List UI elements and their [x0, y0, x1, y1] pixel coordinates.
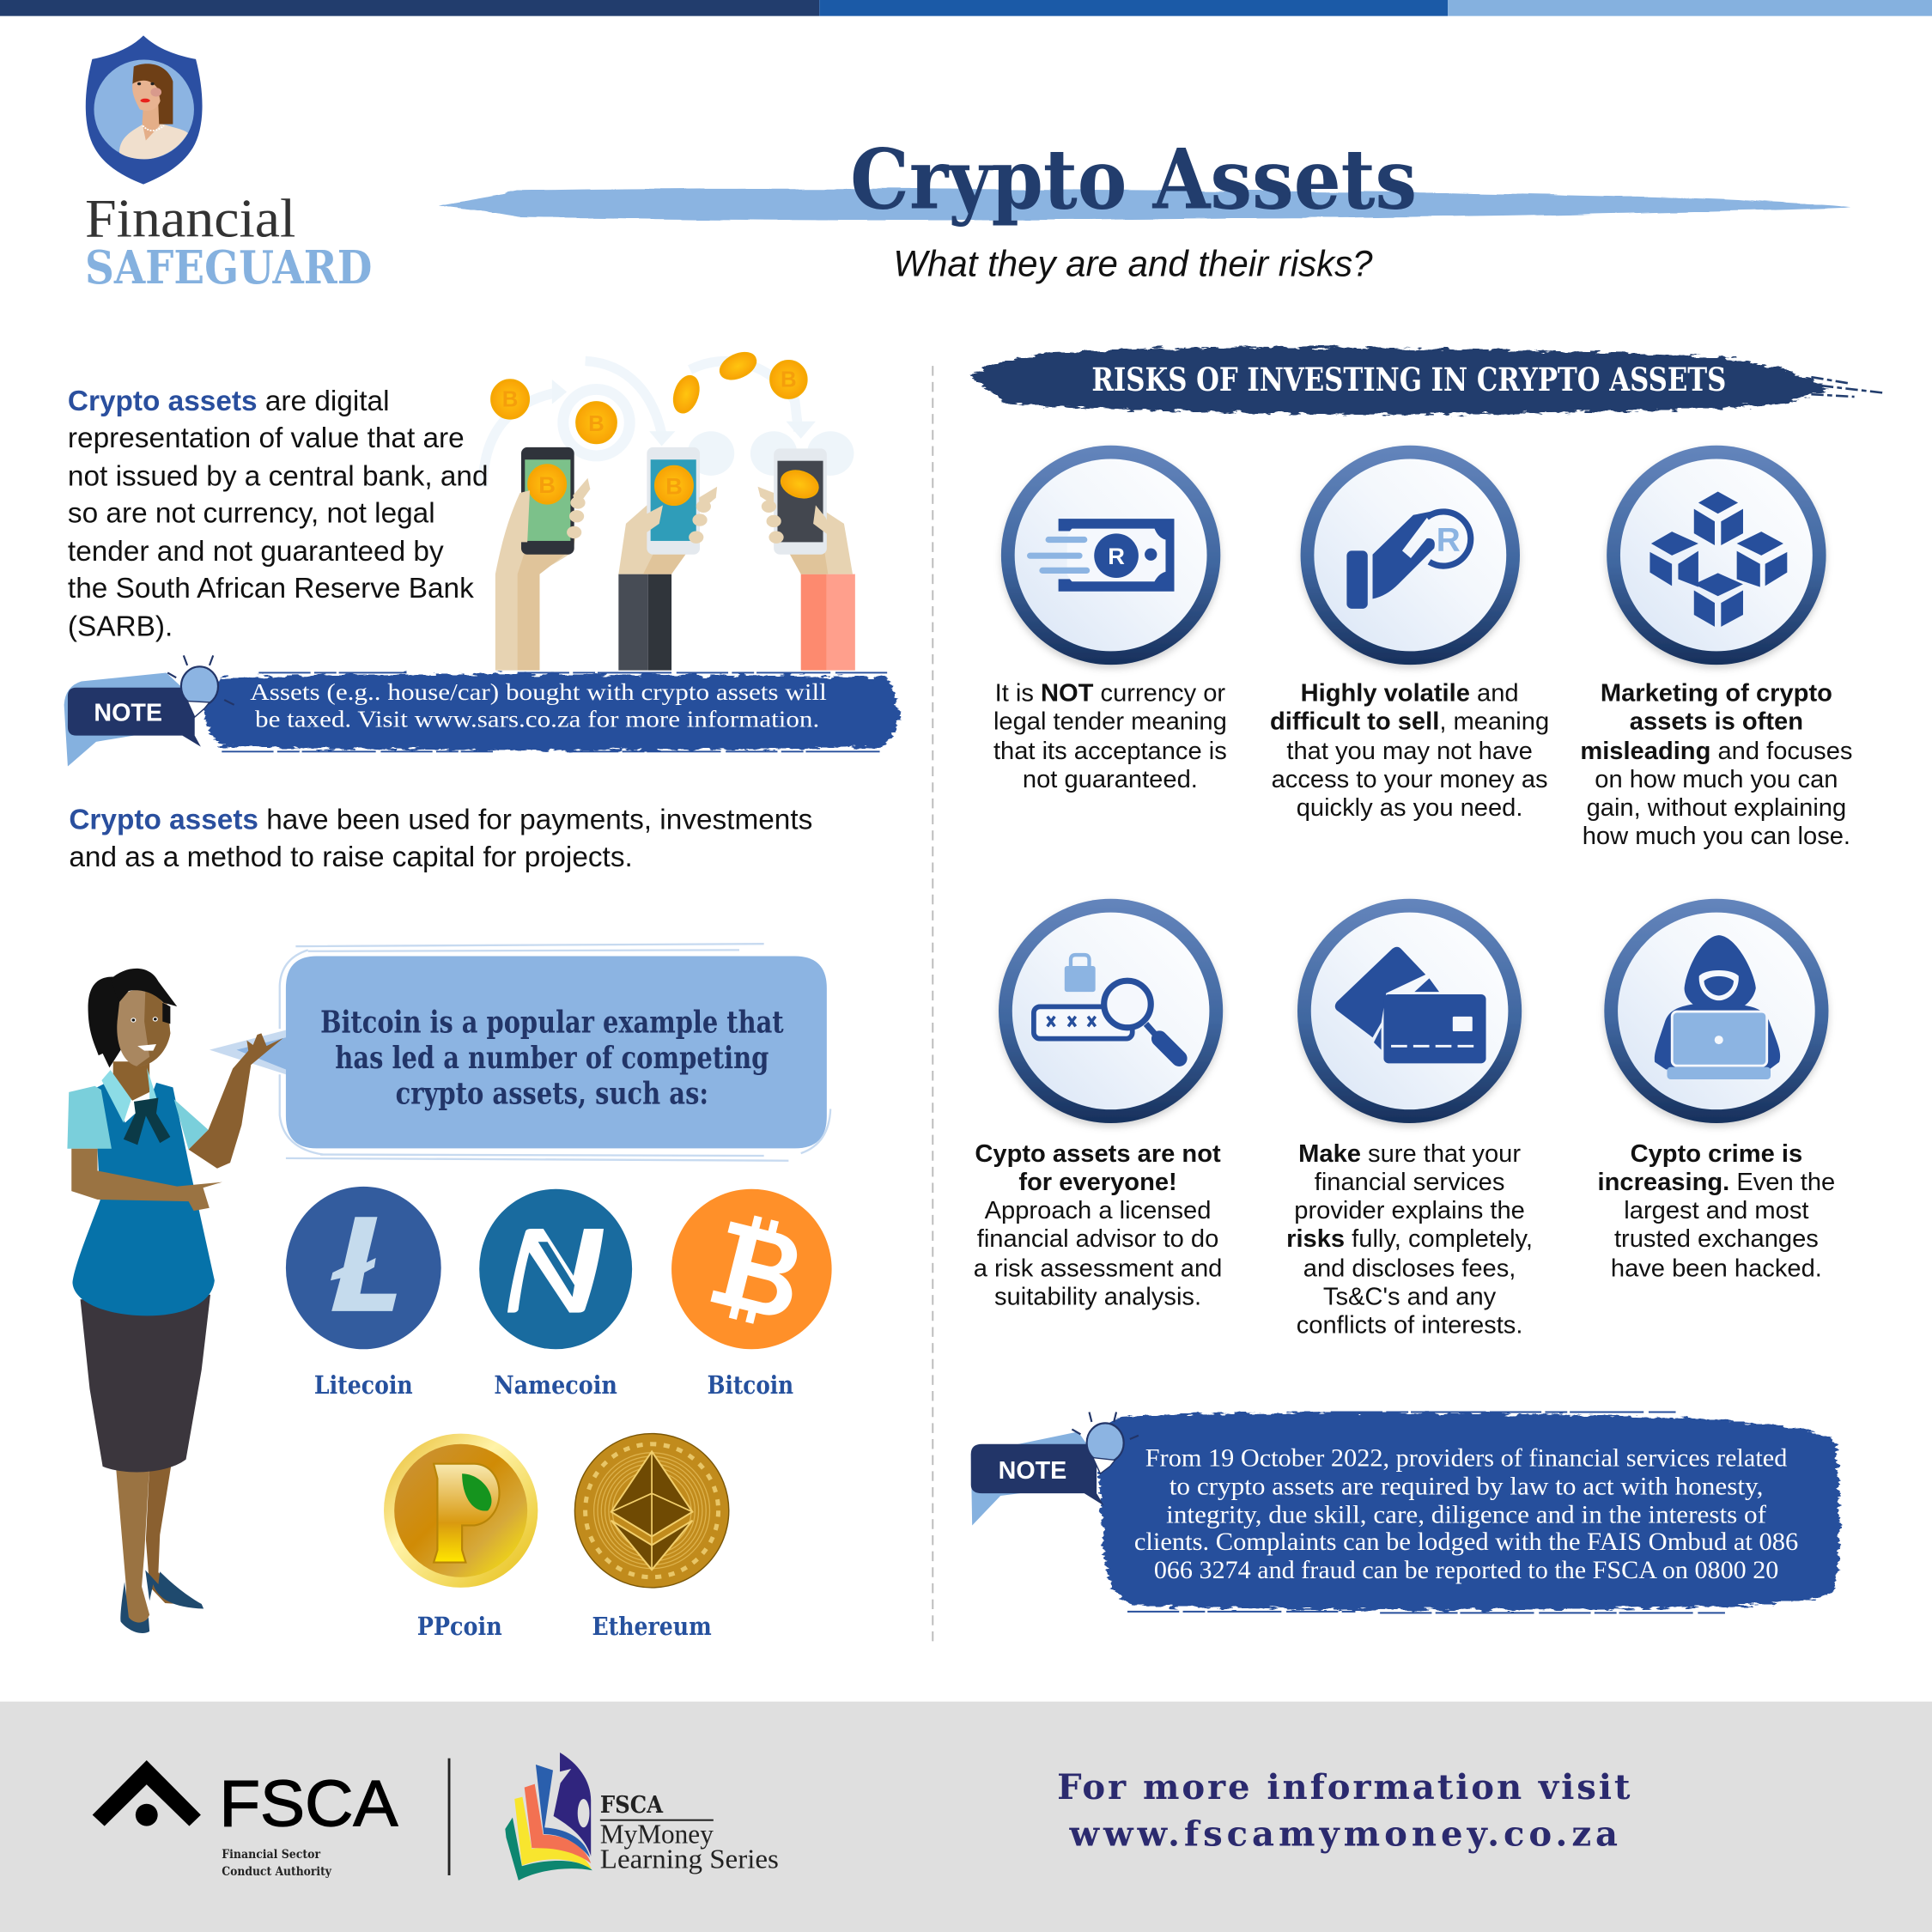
title text: Crypto Assets: [850, 131, 1417, 228]
caption: difficult to sell, meaning: [1270, 708, 1549, 735]
intro paragraph: Crypto assets are digital: [68, 386, 389, 417]
illustration: hands holding phones with bitcoins: B: [781, 368, 797, 392]
illustration: woman presenting: [67, 969, 283, 1633]
caption: on how much you can: [1595, 766, 1838, 793]
note tag: [971, 1431, 1104, 1525]
caption: misleading and focuses: [1580, 738, 1852, 765]
phone 3: [774, 448, 827, 555]
logo text: FSCA: [600, 1791, 664, 1819]
FSCA logo: [93, 1760, 398, 1879]
illustration: hands holding phones with bitcoins: B: [588, 412, 605, 436]
caption: It is NOT currency or: [995, 679, 1225, 707]
coin: PPcoin: [384, 1434, 538, 1641]
coin: Ethereum: Ethereum: [592, 1612, 712, 1641]
caption: a risk assessment and: [974, 1255, 1222, 1283]
note 2: 066 3274 and fraud can be reported to the FSCA on 0800 20: [1154, 1557, 1778, 1584]
caption: financial advisor to do: [977, 1225, 1218, 1253]
footer band: [0, 1702, 1932, 1932]
caption: access to your money as: [1272, 766, 1548, 793]
flying bitcoins: [492, 348, 806, 443]
caption: assets is often: [1630, 708, 1803, 735]
caption: increasing. Even the: [1598, 1169, 1835, 1196]
caption: and discloses fees,: [1303, 1255, 1516, 1283]
caption: [974, 1140, 1222, 1311]
skirt: [81, 1295, 210, 1472]
MyMoney Learning Series logo: MyMoney: [600, 1820, 714, 1850]
caption: [1598, 1140, 1835, 1283]
usage paragraph: [69, 805, 812, 873]
fingers and thumbs: [513, 478, 838, 544]
footer call to action: For more information visit: [1057, 1767, 1631, 1807]
coin: Ethereum: [574, 1434, 729, 1641]
note tag: NOTE: [94, 699, 162, 726]
risks heading banner: [971, 347, 1885, 415]
usage paragraph: Crypto assets have been used for payments, investments: [69, 805, 812, 836]
note 2: clients. Complaints can be lodged with the FAIS Ombud at 086: [1134, 1528, 1798, 1556]
phone 2: B: [665, 472, 683, 499]
note tag: NOTE: [999, 1457, 1066, 1485]
logo word: Financial: Financial: [85, 189, 295, 249]
risk 6: crime increasing: [1598, 899, 1835, 1283]
coin: Bitcoin: [671, 1189, 832, 1400]
logo: Financial Safeguard: [85, 35, 372, 295]
pale arrows and pie shapes: [483, 361, 799, 487]
left arm: [71, 1149, 222, 1211]
icon: hacker with laptop: [1604, 899, 1828, 1123]
shoes: [120, 1582, 149, 1633]
crypto coins: [286, 1187, 832, 1641]
title with brush stroke: [439, 131, 1850, 283]
note text: From 19 October 2022, providers of financial services related: [1145, 1445, 1788, 1473]
note 2: to crypto assets are required by law to act with honesty,: [1170, 1473, 1763, 1501]
footer call to action: [1057, 1767, 1631, 1855]
phone 2: [647, 447, 700, 555]
caption: [1286, 1140, 1533, 1340]
intro paragraph: [68, 386, 489, 642]
caption: trusted exchanges: [1614, 1225, 1819, 1253]
illustration: hands holding phones with bitcoins: [483, 348, 855, 671]
phone 1: [521, 447, 574, 555]
FSCA full name: [222, 1848, 332, 1879]
risk 1: not currency: [993, 446, 1227, 793]
caption: [1270, 679, 1549, 822]
note text: Assets (e.g.. house/car) bought with crypto assets will: [250, 679, 827, 705]
note 2: [971, 1412, 1839, 1613]
brush panel: [204, 674, 900, 750]
note 2: integrity, due skill, care, diligence and in the interests of: [1166, 1502, 1766, 1529]
caption: risks fully, completely,: [1286, 1225, 1533, 1253]
icon: light bulb: [1072, 1412, 1139, 1473]
top: [72, 1082, 215, 1315]
caption: Cypto assets are not: [975, 1140, 1221, 1168]
risk 5: make sure: [1286, 899, 1533, 1340]
back hair: [88, 977, 121, 1067]
icon: banknote: R: [1108, 543, 1125, 569]
collar: [101, 1067, 157, 1123]
caption: legal tender meaning: [993, 708, 1227, 735]
caption: largest and most: [1624, 1197, 1808, 1224]
speech bubble: has led a number of competing: [335, 1040, 769, 1076]
caption: Highly volatile and: [1301, 679, 1519, 707]
caption: quickly as you need.: [1297, 794, 1522, 822]
caption: [993, 679, 1227, 793]
intro paragraph: tender and not guaranteed by: [68, 536, 444, 568]
illustration: hands holding phones with bitcoins: B: [502, 388, 518, 412]
sleeves: [67, 1086, 112, 1149]
fringe: [111, 969, 177, 1024]
top colour bar: [0, 0, 1932, 16]
coin: Namecoin: Namecoin: [494, 1370, 617, 1400]
arm 1: [495, 493, 577, 671]
risk 3: marketing: [1580, 446, 1852, 850]
vertical dashed divider: [932, 366, 933, 1643]
icon: blockchain cubes: [1607, 446, 1826, 665]
caption: that you may not have: [1286, 738, 1533, 765]
note 1: be taxed. Visit www.sars.co.za for more information.: [255, 707, 819, 732]
intro paragraph: not issued by a central bank, and: [68, 460, 489, 492]
caption: provider explains the: [1294, 1197, 1525, 1224]
icon: hand with rand coin: R: [1437, 521, 1461, 558]
caption: suitability analysis.: [994, 1284, 1201, 1311]
caption: have been hacked.: [1611, 1255, 1822, 1283]
logo word: SAFEGUARD: SAFEGUARD: [85, 240, 372, 295]
phone 1: B: [538, 471, 556, 498]
icon: bank cards: [1297, 899, 1522, 1123]
speech bubble: crypto assets, such as:: [396, 1076, 708, 1112]
note tag: [64, 672, 201, 767]
risk 2: volatile: [1270, 446, 1549, 822]
coin: Litecoin: [286, 1187, 441, 1400]
coin: PPcoin: PPcoin: [417, 1612, 502, 1641]
footer call to action: www.fscamymoney.co.za: [1069, 1814, 1618, 1855]
icon: shield with woman portrait: [86, 35, 203, 185]
speech bubble: Bitcoin is a popular example that: [320, 1004, 784, 1040]
caption: Make sure that your: [1298, 1140, 1521, 1168]
intro paragraph: so are not currency, not legal: [68, 497, 435, 529]
caption: how much you can lose.: [1583, 823, 1850, 850]
caption: for everyone!: [1018, 1169, 1177, 1196]
coin: Namecoin: [479, 1189, 632, 1400]
risks heading banner: RISKS OF INVESTING IN CRYPTO ASSETS: [1091, 361, 1726, 398]
footer divider: [448, 1759, 450, 1875]
legs: [116, 1464, 149, 1629]
caption: not guaranteed.: [1023, 766, 1198, 793]
FSCA full name: Financial Sector: [222, 1848, 320, 1862]
sleeve 2: [618, 574, 648, 671]
brush panel: [1099, 1413, 1839, 1610]
icon: open book: [505, 1753, 592, 1880]
icon: banknote: [1001, 446, 1220, 665]
brush stroke behind title: [439, 189, 1850, 220]
subtitle: What they are and their risks?: [893, 243, 1373, 283]
caption: [1580, 679, 1852, 850]
caption: gain, without explaining: [1587, 794, 1846, 822]
MyMoney Learning Series logo: [505, 1753, 779, 1880]
risk 4: not for everyone: [974, 899, 1223, 1311]
sleeve 3: [801, 574, 827, 671]
icon: light bulb: [167, 655, 234, 717]
caption: that its acceptance is: [993, 738, 1227, 765]
caption: Marketing of crypto: [1601, 679, 1832, 707]
usage paragraph: and as a method to raise capital for projects.: [69, 841, 633, 873]
right arm: [189, 1033, 283, 1169]
caption: Ts&C's and any: [1323, 1284, 1497, 1311]
coin: Bitcoin: Bitcoin: [708, 1370, 793, 1400]
note 1: [64, 655, 900, 767]
icon: password and magnifier: [999, 899, 1223, 1123]
icon: hand with rand coin: [1301, 446, 1520, 665]
face: [117, 990, 170, 1066]
bow: [124, 1097, 170, 1145]
neck: [113, 1061, 149, 1101]
caption: Approach a licensed: [985, 1197, 1211, 1224]
caption: conflicts of interests.: [1297, 1312, 1522, 1340]
intro paragraph: representation of value that are: [68, 422, 465, 454]
intro paragraph: (SARB).: [68, 611, 173, 642]
FSCA full name: Conduct Authority: [222, 1865, 332, 1879]
speech bubble: [210, 944, 830, 1161]
coin: Litecoin: Litecoin: [314, 1370, 413, 1400]
MyMoney Learning Series logo: Learning Series: [600, 1844, 779, 1874]
caption: financial services: [1315, 1169, 1504, 1196]
caption: Cypto crime is: [1631, 1140, 1802, 1168]
icon: FSCA roof mark: [93, 1760, 201, 1826]
intro paragraph: the South African Reserve Bank: [68, 573, 474, 605]
FSCA wordmark: FSCA: [219, 1768, 398, 1841]
